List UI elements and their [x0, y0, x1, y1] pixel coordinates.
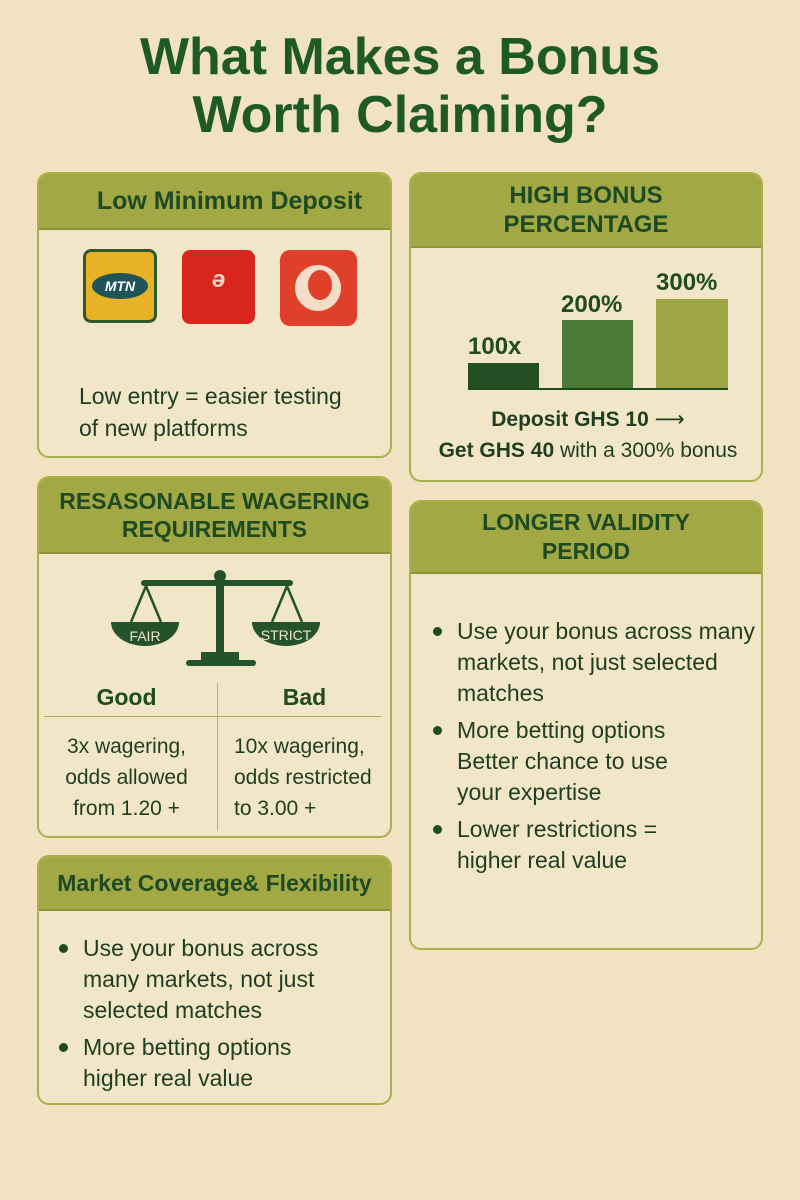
heading: high bonus percentage [411, 174, 761, 248]
icon: vodafone [280, 250, 357, 326]
heading: market coverage [39, 857, 390, 911]
heading: market coverage: Market Coverage& Flexibility [57, 870, 372, 896]
icon: scales: FAIR [129, 628, 161, 644]
list: validity points: markets, not just selected [457, 649, 718, 675]
heading: longer validity [411, 502, 761, 574]
title [140, 28, 660, 144]
table: good vs bad: Bad [283, 684, 326, 710]
table: good vs bad: 3x wagering, [67, 735, 186, 758]
panel: wagering requirements [37, 476, 392, 838]
text: deposit example: Get GHS 40 with a 300% bonus [439, 439, 737, 462]
icon: MTN [83, 249, 157, 323]
heading: high bonus percentage: PERCENTAGE [504, 211, 668, 238]
table: good vs bad: from 1.20 + [73, 797, 180, 820]
panel: high bonus percentage [409, 172, 763, 482]
bar chart: 200% [561, 291, 622, 318]
table: good vs bad: to 3.00 + [234, 797, 316, 820]
list: coverage points [59, 935, 318, 1091]
table: good vs bad: 10x wagering, [234, 735, 365, 758]
heading: low minimum deposit: Low Minimum Deposit [97, 186, 362, 214]
bar chart: 100x [468, 333, 521, 360]
panel: low minimum deposit [37, 172, 392, 458]
text: low entry [79, 383, 342, 441]
list: validity points: higher real value [457, 847, 627, 873]
text: deposit example [439, 408, 737, 462]
list: validity points: Better chance to use [457, 748, 668, 774]
list: validity points: your expertise [457, 779, 601, 805]
bar chart: 300% [656, 269, 717, 296]
text: deposit example: Deposit GHS 10 ⟶ [491, 408, 685, 431]
table: good vs bad: Good [96, 684, 157, 710]
heading: low minimum deposit [39, 174, 390, 230]
table: good vs bad: odds restricted [234, 766, 372, 789]
heading: wagering [39, 478, 390, 554]
list: validity points [433, 618, 755, 873]
bar chart [468, 269, 728, 390]
icon: scales: STRICT [261, 627, 312, 643]
panel: longer validity [409, 500, 763, 950]
list: coverage points: higher real value [83, 1065, 253, 1091]
list: coverage points: More betting options [83, 1034, 291, 1060]
title: What Makes a Bonus [140, 28, 660, 86]
table: good vs bad: odds allowed [65, 766, 188, 789]
list: validity points: More betting options [457, 717, 665, 743]
list: validity points: Lower restrictions = [457, 816, 657, 842]
heading: wagering: REQUIREMENTS [122, 516, 307, 542]
heading: high bonus percentage: HIGH BONUS [509, 182, 663, 209]
list: validity points: matches [457, 680, 544, 706]
list: coverage points: selected matches [83, 997, 262, 1023]
icon: scales [111, 570, 320, 666]
icon: airtel [182, 250, 255, 324]
list: coverage points: Use your bonus across [83, 935, 318, 961]
text: low entry: of new platforms [79, 415, 248, 441]
panel: market coverage [37, 855, 392, 1105]
icon: MTN: MTN [105, 278, 135, 294]
heading: longer validity: LONGER VALIDITY [482, 509, 690, 535]
list: validity points: Use your bonus across many [457, 618, 755, 644]
list: coverage points: many markets, not just [83, 966, 314, 992]
icon: airtel: ə [212, 266, 225, 293]
text: low entry: Low entry = easier testing [79, 383, 342, 409]
heading: longer validity: PERIOD [542, 538, 630, 564]
heading: wagering: RESASONABLE WAGERING [59, 488, 370, 514]
table: good vs bad [44, 683, 381, 831]
title: Worth Claiming? [192, 86, 608, 144]
